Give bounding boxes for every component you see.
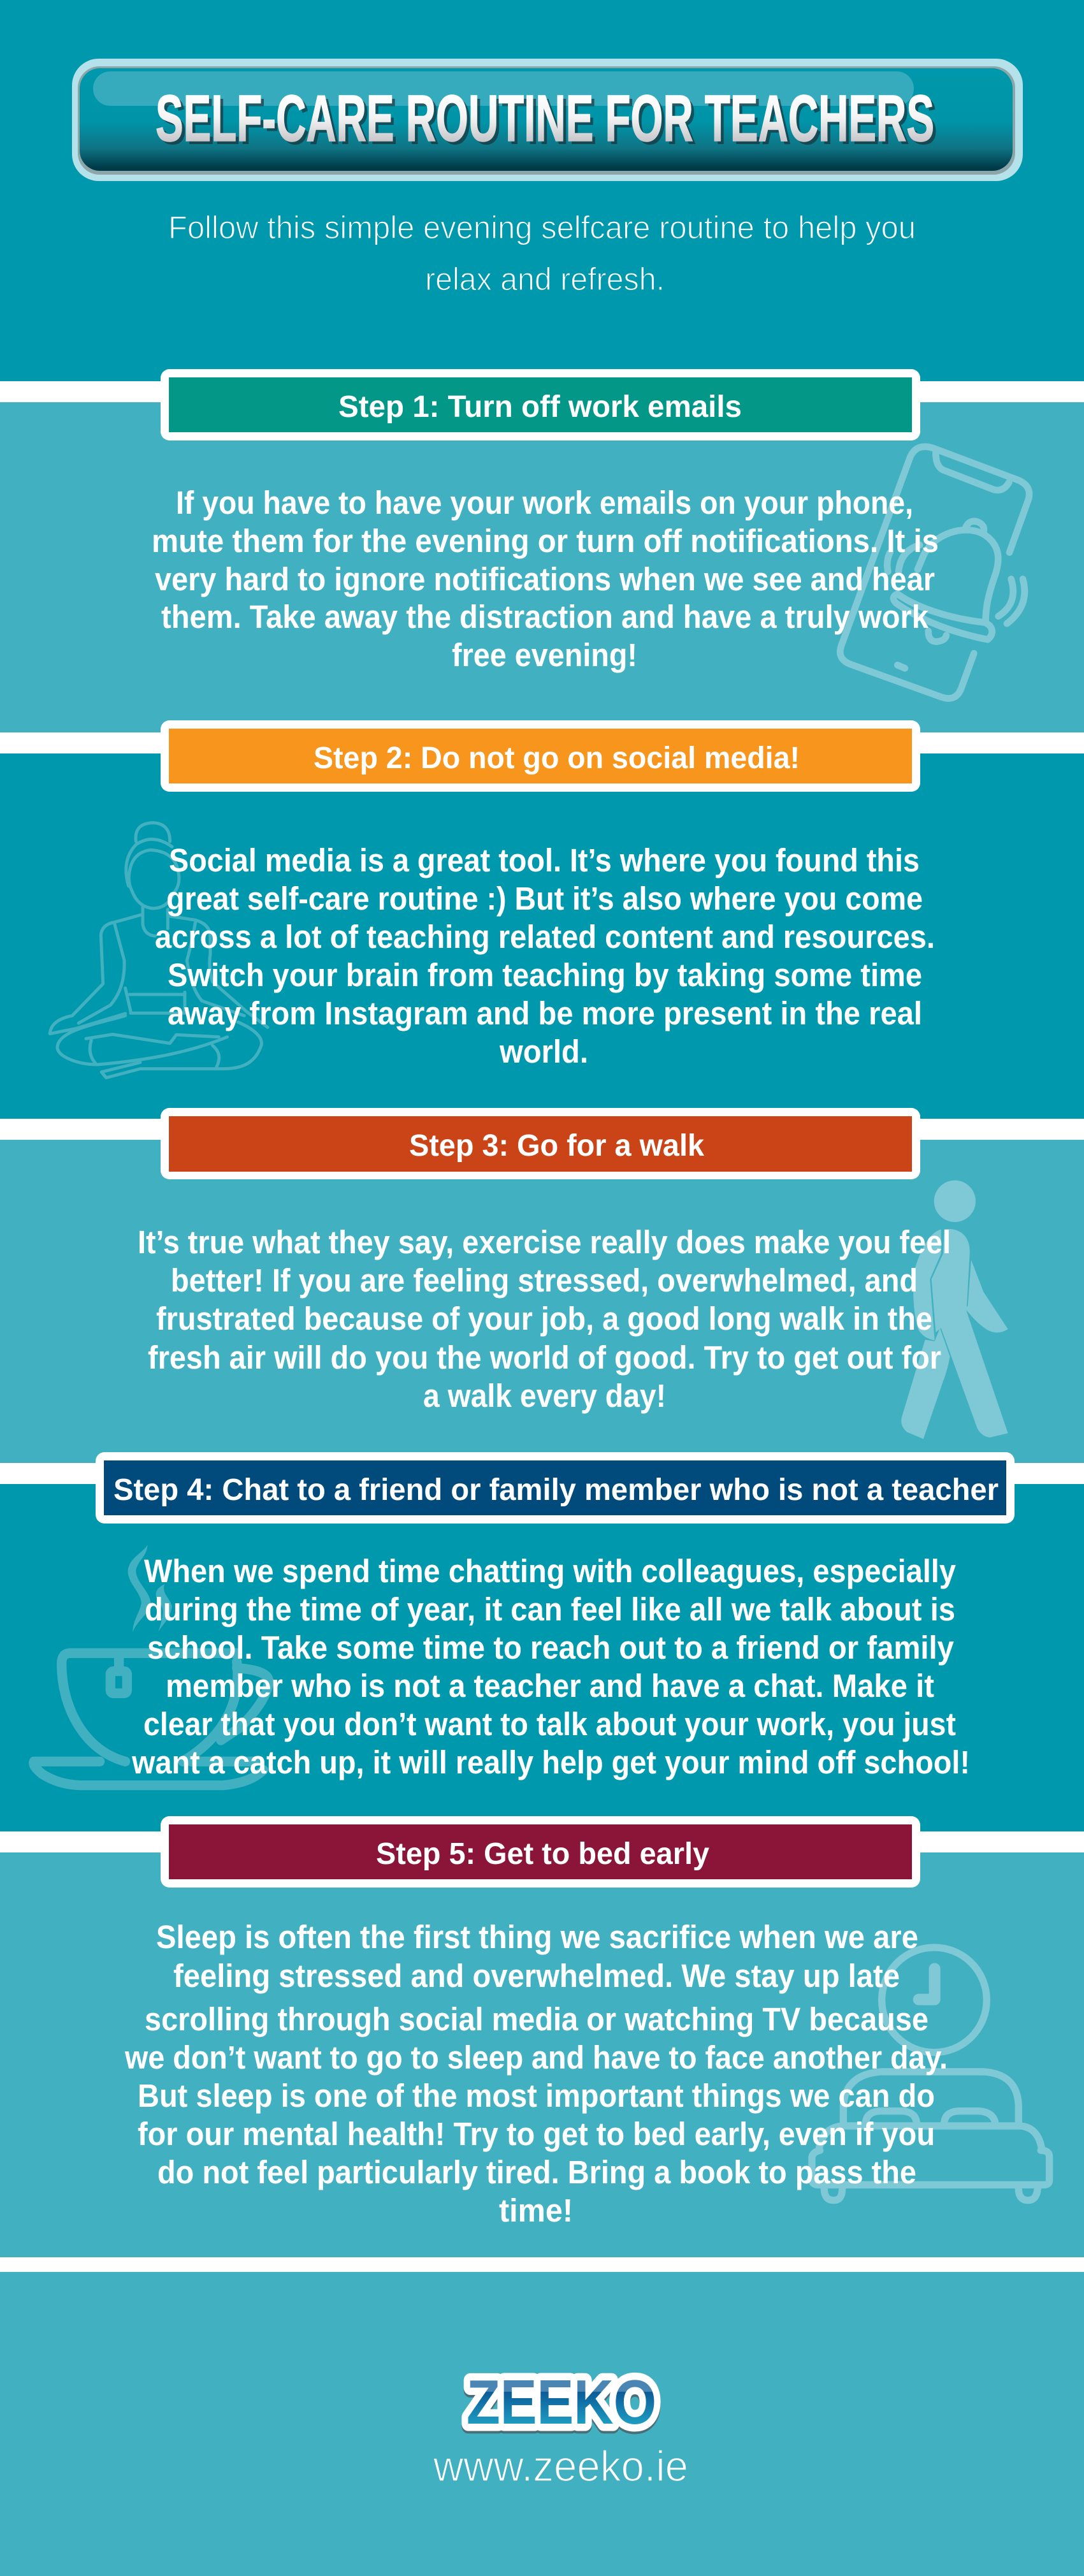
step 3 heading (161, 1108, 920, 1179)
step 1 heading: Step 1: Turn off work emails (338, 390, 742, 424)
step 2 body text: Social media is a great tool. It’s where you found this (169, 842, 920, 878)
panel: step 2 (0, 720, 1084, 1119)
step 1 heading (161, 369, 920, 440)
step 4 body text (131, 1553, 970, 1780)
step 5 body text: time! (499, 2192, 573, 2229)
icon: tea cup (34, 1545, 269, 1786)
panel: header (0, 0, 1084, 381)
intro text: relax and refresh. (425, 261, 665, 297)
panel: footer (0, 2257, 1084, 2576)
logo: ZEEKO: ZEEKO (466, 2367, 656, 2437)
step 2 body text: great self-care routine :) But it’s also where you come (166, 880, 923, 917)
panel: step 5 (0, 1816, 1084, 2257)
logo: ZEEKO: ZEEKO (466, 2369, 656, 2440)
icon: meditating person (50, 823, 268, 1078)
step 5 heading (161, 1816, 920, 1888)
step 2 body text (155, 842, 935, 1070)
step 2 body text: across a lot of teaching related content and resources. (155, 919, 935, 955)
step 1 body text: free evening! (452, 637, 637, 673)
title banner (72, 59, 1023, 181)
panel: step 3 (0, 1108, 1084, 1463)
step 3 body text: fresh air will do you the world of good. Try to get out for (148, 1339, 941, 1376)
step 3 body text: better! If you are feeling stressed, overwhelmed, and (171, 1262, 918, 1299)
step 4 body text: clear that you don’t want to talk about your work, you just (143, 1706, 956, 1742)
step 5 body text: for our mental health! Try to get to bed early, even if you (138, 2116, 935, 2152)
step 2 heading (161, 720, 920, 792)
step 5 body text: do not feel particularly tired. Bring a book to pass the (157, 2154, 916, 2190)
step 4 body text: member who is not a teacher and have a chat. Make it (166, 1668, 934, 1704)
icon: phone with bell (840, 447, 1029, 699)
website url: www.zeeko.ie (433, 2442, 688, 2491)
step 1 body text: them. Take away the distraction and have a truly work (161, 599, 929, 635)
step 5 heading: Step 5: Get to bed early (376, 1837, 709, 1871)
intro text: Follow this simple evening selfcare routine to help you (168, 210, 916, 245)
step 1 body text: mute them for the evening or turn off notifications. It is (152, 523, 939, 559)
icon: walking person (901, 1181, 1008, 1439)
step 5 body text: feeling stressed and overwhelmed. We stay up late (173, 1958, 900, 1994)
icon: clock and bed (812, 1947, 1050, 2201)
step 3 heading: Step 3: Go for a walk (409, 1129, 704, 1163)
step 3 body text (138, 1224, 951, 1414)
step 4 body text: When we spend time chatting with colleagues, especially (144, 1553, 957, 1589)
intro text (168, 210, 916, 297)
step 4 heading (96, 1452, 1015, 1524)
step 4 heading: Step 4: Chat to a friend or family member who is not a teacher (113, 1473, 999, 1507)
step 3 body text: frustrated because of your job, a good long walk in the (156, 1300, 932, 1337)
logo: ZEEKO: ZEEKO (466, 2367, 656, 2437)
step 5 body text: Sleep is often the first thing we sacrifice when we are (156, 1919, 918, 1955)
step 5 body text: But sleep is one of the most important things we can do (138, 2078, 935, 2114)
step 4 body text: want a catch up, it will really help get your mind off school! (131, 1744, 970, 1780)
panel: step 1 (0, 369, 1084, 732)
step 3 body text: a walk every day! (423, 1378, 666, 1414)
step 5 body text: scrolling through social media or watching TV because (145, 2001, 929, 2037)
step 5 body text (124, 1919, 948, 2229)
panel: step 4 (0, 1452, 1084, 1831)
step 4 body text: during the time of year, it can feel like all we talk about is (145, 1591, 955, 1627)
step 5 body text: we don’t want to go to sleep and have to face another day. (124, 2039, 948, 2076)
step 3 body text: It’s true what they say, exercise really does make you feel (138, 1224, 951, 1260)
step 1 body text: If you have to have your work emails on your phone, (176, 484, 913, 521)
step 4 body text: school. Take some time to reach out to a friend or family (147, 1629, 955, 1666)
step 2 body text: Switch your brain from teaching by taking some time (168, 957, 922, 993)
step 1 body text (152, 484, 939, 673)
step 1 body text: very hard to ignore notifications when we see and hear (155, 561, 935, 597)
step 2 body text: away from Instagram and be more present in the real (168, 995, 922, 1031)
step 2 body text: world. (499, 1033, 588, 1070)
step 2 heading: Step 2: Do not go on social media! (314, 741, 800, 775)
